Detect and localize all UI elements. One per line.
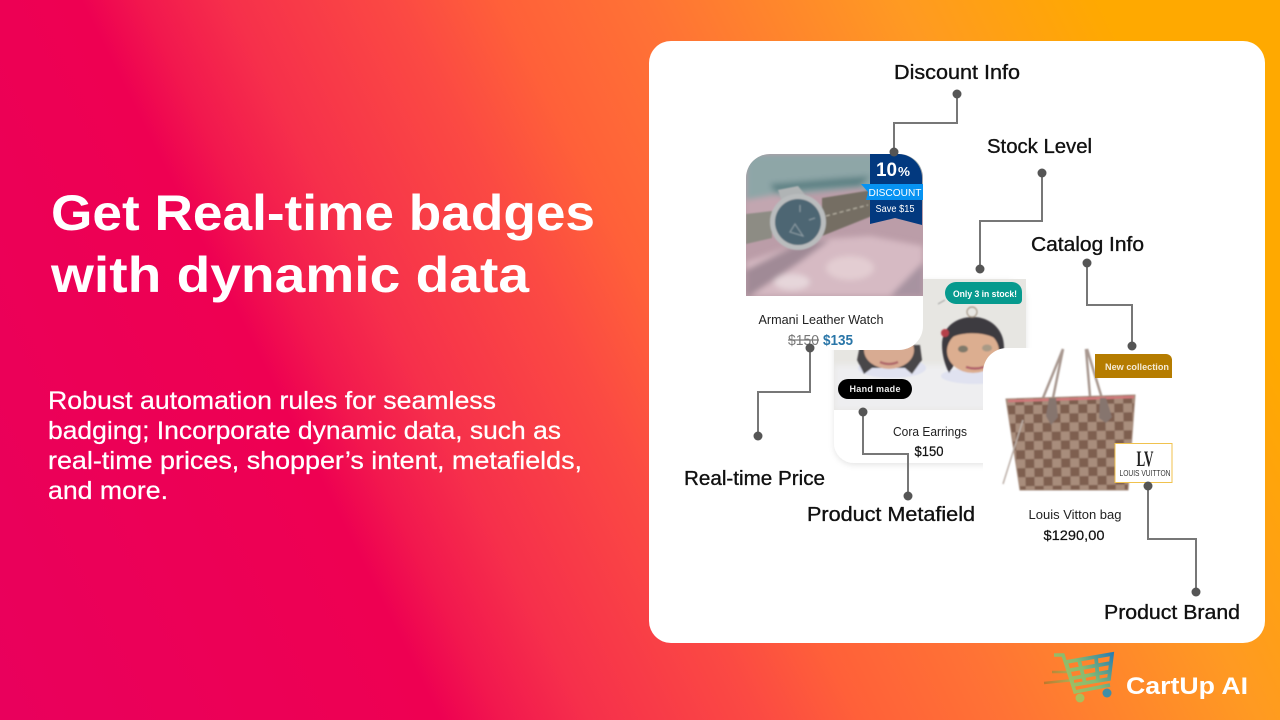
product name and price: $150 (914, 444, 944, 459)
connector: Product Metafield (858, 408, 912, 500)
description text: Robust automation rules for seamless (48, 387, 496, 415)
badge: New collection: New collection (1105, 362, 1169, 373)
connector: Catalog Info (1082, 258, 1136, 350)
connector: Stock Level (976, 168, 1046, 274)
bag illustration (1003, 349, 1135, 490)
watch photo (746, 154, 923, 296)
product name and price: $135 (823, 333, 853, 349)
logo text: CartUp AI (1126, 673, 1248, 700)
badge: Hand made: Hand made (850, 384, 900, 394)
title (50, 185, 595, 303)
logo: CartUp AI (1044, 654, 1248, 702)
product name and price: Cora Earrings (893, 425, 967, 439)
badge: brand logo (1115, 444, 1172, 482)
callout labels: Product Metafield (807, 504, 975, 526)
description text: and more. (48, 477, 168, 505)
badge: Only 3 in stock: Only 3 in stock! (953, 289, 1017, 300)
product name and price: Louis Vitton bag (1028, 507, 1122, 522)
connector: Real-time Price (754, 344, 814, 440)
description text (48, 387, 582, 505)
product name and price: Armani Leather Watch (758, 312, 884, 327)
badge: 10% discount ribbon: Save $15 (876, 204, 915, 215)
callout labels: Stock Level (987, 136, 1092, 158)
badge: 10% discount ribbon: 10 (876, 160, 897, 181)
title: Get Real-time badges (51, 185, 595, 241)
badge: 10% discount ribbon: % (898, 164, 910, 179)
badge: brand logo: LOUIS VUITTON (1120, 469, 1171, 478)
description text: real-time prices, shopper’s intent, metafields, (48, 447, 582, 475)
connector: Discount Info (890, 90, 962, 156)
title: with dynamic data (50, 247, 530, 303)
callout labels: Discount Info (894, 62, 1020, 84)
badge: Only 3 in stock (945, 282, 1022, 304)
card: Armani Leather Watch (746, 154, 923, 350)
card: Cora Earrings (834, 279, 1026, 463)
badge: 10% discount ribbon: DISCOUNT (868, 187, 922, 199)
badge: New collection (1095, 354, 1172, 378)
card: Louis Vuitton bag (983, 348, 1172, 560)
product name and price (758, 312, 884, 349)
product name and price: $1290,00 (1044, 527, 1105, 543)
callout labels (684, 62, 1240, 624)
badge: brand logo: LV (1136, 446, 1154, 471)
product name and price: $150 (788, 333, 819, 349)
badge: Hand made (838, 379, 912, 399)
badge: 10% discount ribbon (861, 154, 923, 225)
icon: shopping cart (1044, 654, 1112, 702)
product name and price (893, 425, 967, 459)
product name and price (1028, 507, 1122, 543)
earrings photo (834, 279, 1026, 410)
connector: Product Brand (1144, 482, 1200, 596)
callout labels: Real-time Price (684, 468, 825, 490)
callout labels: Product Brand (1104, 602, 1240, 624)
callout labels: Catalog Info (1031, 234, 1144, 256)
panel: white feature card (649, 41, 1265, 643)
description text: badging; Incorporate dynamic data, such as (48, 417, 561, 445)
